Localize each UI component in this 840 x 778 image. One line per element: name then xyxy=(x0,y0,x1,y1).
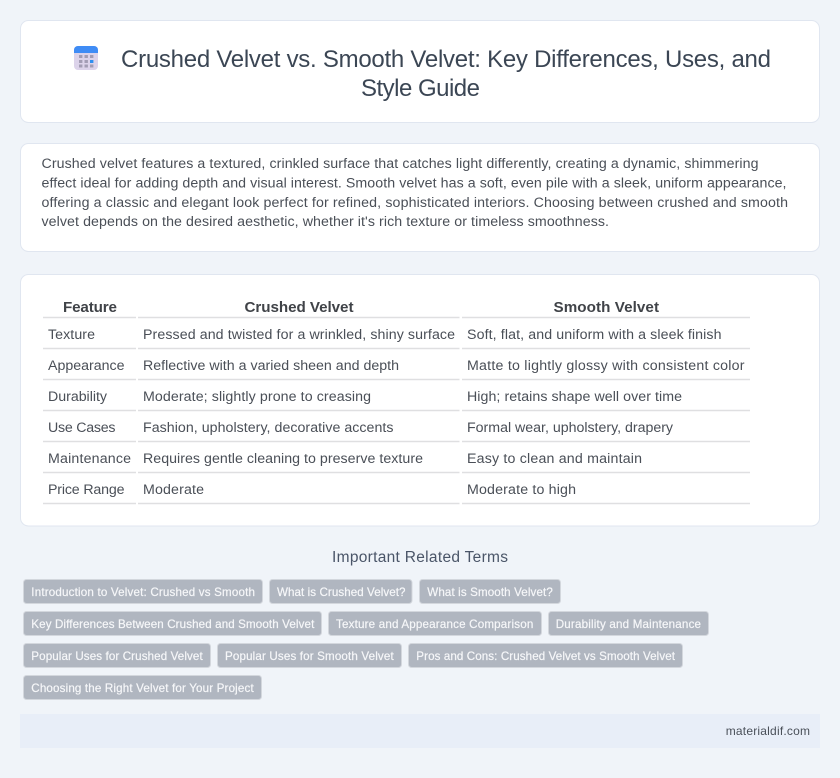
tag: Durability and Maintenance xyxy=(556,618,701,631)
footer: materialdif.com xyxy=(726,724,810,738)
row: appearance: Reflective with a varied sheen and depth xyxy=(143,358,399,374)
tag xyxy=(24,580,262,604)
text block: introduction xyxy=(42,156,788,230)
tag: Texture and Appearance Comparison xyxy=(336,618,533,631)
row: durability xyxy=(48,389,682,405)
tag xyxy=(24,676,262,700)
row: maintenance: Easy to clean and maintain xyxy=(467,451,642,467)
row: use cases: Fashion, upholstery, decorative accents xyxy=(143,420,394,436)
tag xyxy=(24,612,322,636)
tag xyxy=(548,612,708,636)
row: texture: Texture xyxy=(48,327,95,343)
table header: Crushed Velvet xyxy=(244,299,354,316)
heading: important related terms: Important Related Terms xyxy=(332,549,508,566)
text block: introduction: Crushed velvet features a textured, crinkled surface that catches light differently, creating a dynamic, shimmering xyxy=(42,156,758,172)
tag: Key Differences Between Crushed and Smooth Velvet xyxy=(31,618,315,631)
text block: introduction: effect ideal for adding depth and visual interest. Smooth velvet has a soft, even pile with a sleek, uniform appearance, xyxy=(42,176,786,192)
tag: Pros and Cons: Crushed Velvet vs Smooth Velvet xyxy=(416,650,676,663)
tags: related terms xyxy=(24,580,708,700)
table header xyxy=(63,299,659,316)
tag: What is Smooth Velvet? xyxy=(427,586,553,599)
tag: Popular Uses for Smooth Velvet xyxy=(225,650,394,663)
tag: Choosing the Right Velvet for Your Project xyxy=(31,682,254,695)
row: appearance xyxy=(48,358,745,374)
row: maintenance xyxy=(48,451,642,467)
tag: Introduction to Velvet: Crushed vs Smooth xyxy=(31,586,255,599)
title: Style Guide xyxy=(361,75,480,102)
tag xyxy=(24,644,210,668)
row: use cases: Use Cases xyxy=(48,420,116,436)
tag xyxy=(420,580,560,604)
text block: introduction: velvet depends on the desired aesthetic, whether it's rich texture or timeless smoothness. xyxy=(42,214,609,230)
row: texture: Soft, flat, and uniform with a sleek finish xyxy=(467,327,722,343)
row: appearance: Appearance xyxy=(48,358,125,374)
tag: What is Crushed Velvet? xyxy=(277,586,406,599)
tag xyxy=(270,580,412,604)
row: use cases: Formal wear, upholstery, drapery xyxy=(467,420,674,436)
panel: comparison table xyxy=(20,274,820,526)
row: price range: Moderate to high xyxy=(467,482,576,498)
tag xyxy=(328,612,542,636)
row: appearance: Matte to lightly glossy with consistent color xyxy=(467,358,745,374)
panel: introduction xyxy=(20,144,820,252)
row: price range xyxy=(48,482,576,498)
row: durability: Durability xyxy=(48,389,108,405)
row: price range: Moderate xyxy=(143,482,204,498)
footer xyxy=(20,714,820,748)
row: price range: Price Range xyxy=(48,482,125,498)
title: Crushed Velvet vs. Smooth Velvet: Key Differences, Uses, and xyxy=(121,46,771,73)
row: durability: High; retains shape well over time xyxy=(467,389,682,405)
panel: header xyxy=(20,20,820,122)
row: use cases xyxy=(48,420,674,436)
title xyxy=(121,46,771,102)
table header: Feature xyxy=(63,299,117,316)
tag xyxy=(408,644,682,668)
row: maintenance: Requires gentle cleaning to preserve texture xyxy=(143,451,423,467)
tag: Popular Uses for Crushed Velvet xyxy=(31,650,203,663)
tag xyxy=(218,644,402,668)
row: texture xyxy=(48,327,722,343)
row: maintenance: Maintenance xyxy=(48,451,131,467)
icon: calendar xyxy=(74,46,98,70)
row: durability: Moderate; slightly prone to creasing xyxy=(143,389,371,405)
table header: Smooth Velvet xyxy=(554,299,659,316)
text block: introduction: offering a classic and elegant look perfect for refined, sophisticated interiors. Choosing between crushed and smooth xyxy=(42,195,788,211)
row: texture: Pressed and twisted for a wrinkled, shiny surface xyxy=(143,327,455,343)
